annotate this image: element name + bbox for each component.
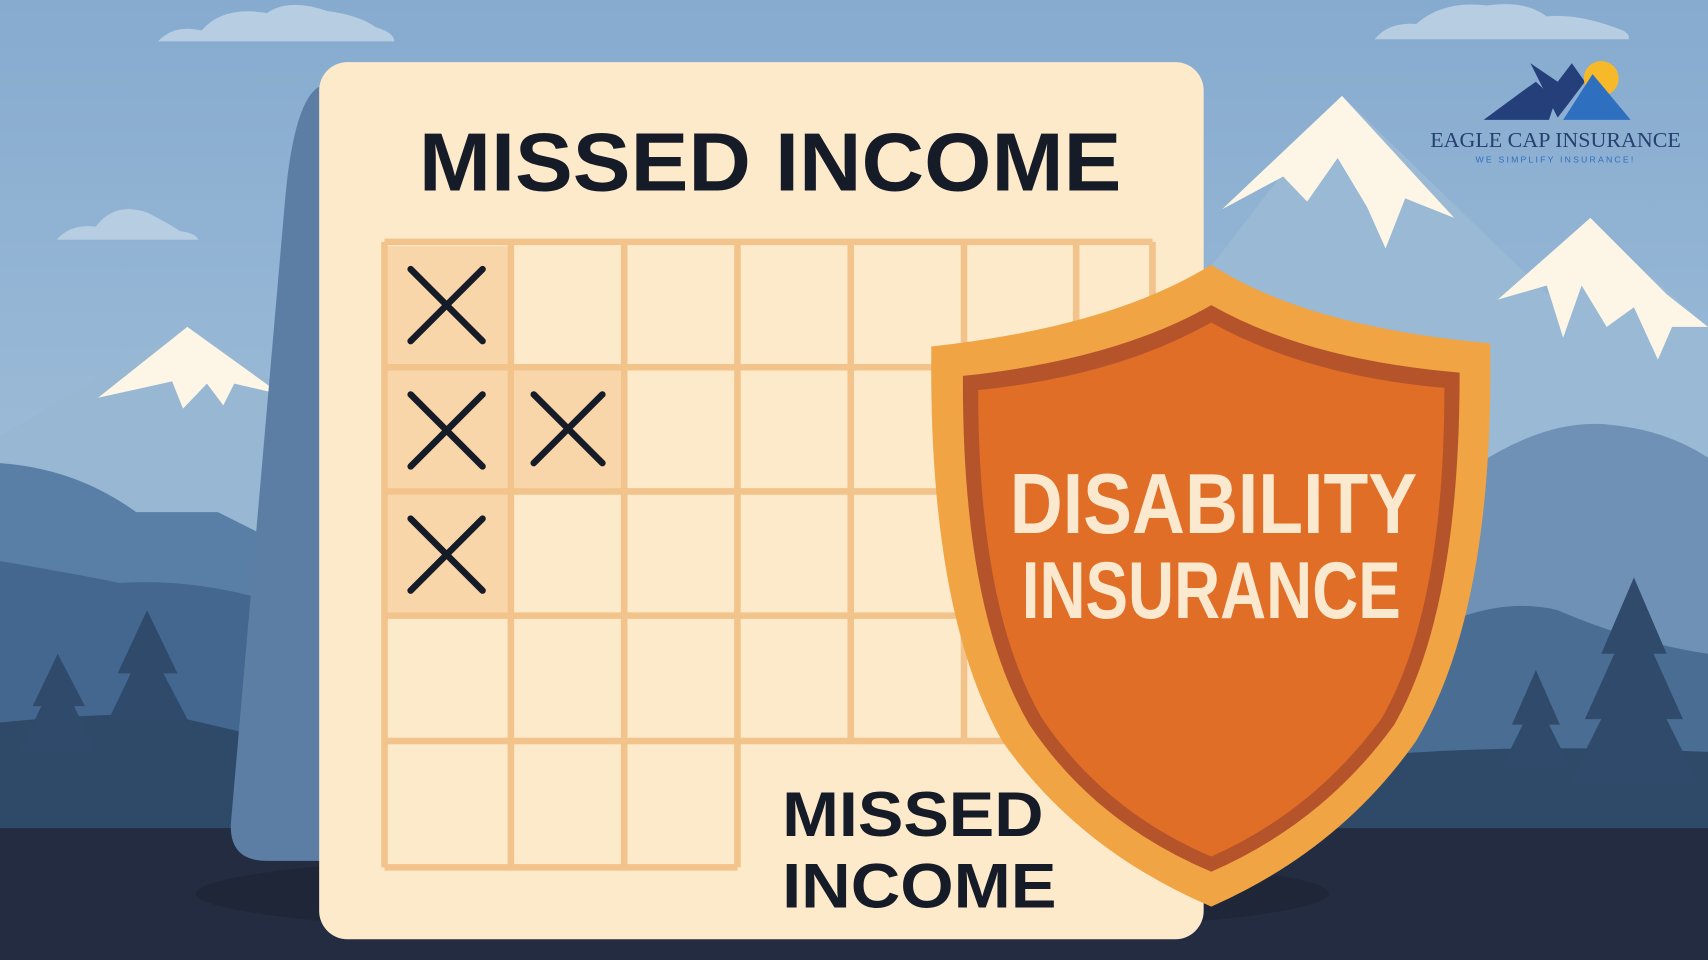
calendar grid <box>385 242 1152 867</box>
shield <box>931 265 1490 907</box>
trees <box>20 578 1699 785</box>
shield text: DISABILITY <box>1010 457 1417 552</box>
bottom label: INCOME <box>782 852 1057 922</box>
bottom label: MISSED <box>782 780 1044 850</box>
title: MISSED INCOME <box>419 116 1121 209</box>
hills <box>0 463 327 828</box>
logo: WE SIMPLIFY INSURANCE! <box>1476 154 1635 164</box>
card stand <box>231 87 359 861</box>
clouds <box>57 4 1629 240</box>
shield text: INSURANCE <box>1022 546 1401 636</box>
mountains far <box>0 96 1708 763</box>
logo <box>1430 61 1681 164</box>
ground <box>0 828 1708 960</box>
x marks <box>411 269 602 591</box>
card <box>319 62 1204 939</box>
logo: EAGLE CAP INSURANCE <box>1430 130 1681 152</box>
